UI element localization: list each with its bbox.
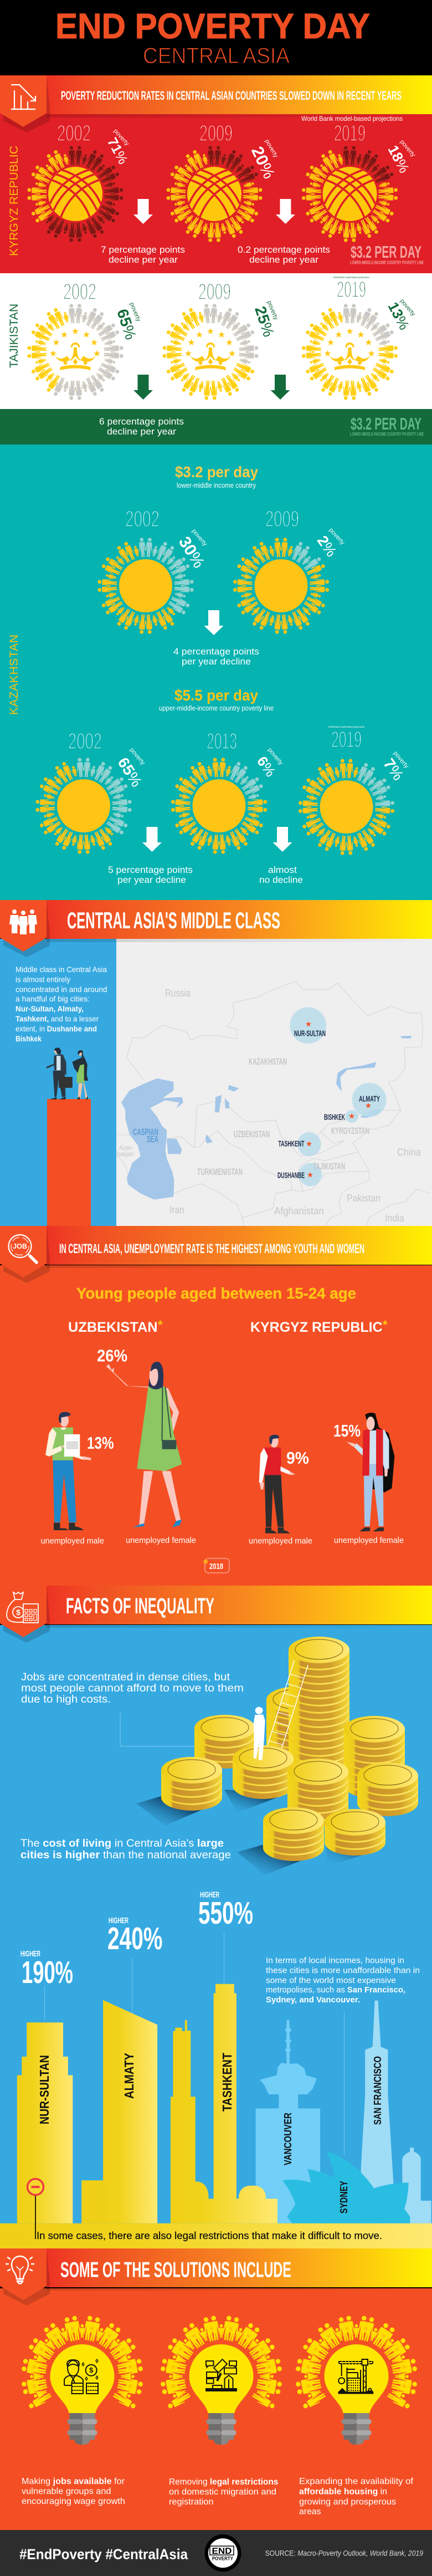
building labels: TASHKENT	[220, 2053, 234, 2112]
dotted leader	[120, 1713, 204, 1746]
icon: no entry sign	[28, 2179, 43, 2239]
panel: unemployment	[0, 1226, 432, 1586]
icon: light bulb	[6, 2256, 34, 2283]
paragraph: housing: these cities is more unaffordable than in	[266, 1966, 420, 1975]
map: DUSHANBE	[277, 1171, 305, 1180]
band: middle class header	[0, 900, 432, 957]
decline text: 5 percentage points	[108, 865, 193, 875]
illustration: business people	[47, 1047, 88, 1099]
building labels: NUR-SULTAN	[37, 2055, 52, 2124]
panel: Tajikistan	[0, 273, 432, 444]
people ring 2019	[301, 304, 398, 400]
dotted leaders	[44, 1933, 344, 2155]
subheading: Young people aged between 15-24 age	[76, 1285, 356, 1302]
map: Iran	[169, 1204, 184, 1215]
paragraph: housing: In terms of local incomes, housing in	[266, 1956, 404, 1965]
label 65%: 65%	[115, 754, 146, 790]
people ring 2019	[298, 759, 395, 855]
figure captions: unemployed male	[249, 1536, 312, 1546]
paragraph: cost of living	[20, 1838, 231, 1861]
pedestal	[47, 1099, 91, 1226]
decline text: decline per year	[109, 254, 178, 265]
label Almaty: HIGHER	[109, 1916, 128, 1925]
solution text 3: Expanding the availability of	[299, 2477, 414, 2486]
solution text 2	[169, 2477, 278, 2507]
people ring 2002	[35, 758, 132, 854]
paragraph: jobs	[21, 1672, 244, 1705]
map: ALMATY	[359, 1094, 380, 1104]
map: CASPIAN	[133, 1127, 158, 1137]
year 2009: 2009	[265, 506, 299, 531]
building labels: SYDNEY	[338, 2181, 349, 2214]
decline text: 4 percentage points	[173, 646, 259, 657]
label Nur-Sultan: 190%	[22, 1955, 73, 1990]
icon: job magnifier	[9, 1235, 37, 1263]
solution text 2: Removing legal restrictions	[169, 2477, 278, 2487]
panel: Kyrgyz Republic	[0, 75, 432, 273]
figure captions: unemployed female	[334, 1536, 404, 1545]
panel: middle class	[0, 900, 432, 1226]
paragraph: housing	[266, 1956, 420, 2005]
subheading: lower-middle income country	[177, 481, 256, 489]
people ring 2009	[162, 304, 259, 400]
year 2019: 2019	[334, 120, 366, 146]
logo: POVERTY	[212, 2556, 233, 2562]
arrow	[142, 827, 162, 852]
value 15%: 15%	[333, 1421, 361, 1440]
year 2002: 2002	[125, 506, 160, 531]
projection note: World Bank model-based projections	[301, 115, 403, 122]
label Almaty	[107, 1916, 163, 1956]
poverty caption: poverty	[191, 528, 209, 548]
people ring 2002	[27, 304, 124, 400]
map: NUR-SULTAN	[294, 1029, 326, 1039]
icon: declining chart	[11, 85, 35, 109]
country heading: UZBEKISTAN	[68, 1320, 158, 1335]
footer	[0, 2530, 432, 2576]
map: BISHKEK	[324, 1113, 345, 1122]
band: inequality header	[0, 1586, 432, 1643]
label 6%: 6%	[254, 753, 279, 780]
label 30%: 30%	[175, 534, 208, 571]
country label: KYRGYZ REPUBLIC	[8, 146, 20, 256]
bulb 2	[160, 2316, 282, 2445]
bulb 1	[21, 2316, 143, 2445]
heading: SOME OF THE SOLUTIONS INCLUDE	[60, 2258, 291, 2282]
sidebar text: Nur-Sultan, Almaty,	[16, 1004, 84, 1013]
poverty caption: poverty	[327, 527, 346, 546]
label 20%: 20%	[248, 144, 278, 182]
poverty caption: poverty	[128, 747, 147, 766]
year note	[203, 1557, 229, 1573]
sidebar text: Middle class in Central Asia	[16, 965, 107, 974]
solution text 2: registration	[169, 2497, 214, 2507]
figure captions	[41, 1536, 404, 1546]
label 25%: 25%	[251, 304, 277, 339]
sidebar text: Bishkek	[16, 1034, 42, 1043]
map: TURKMENISTAN	[197, 1167, 243, 1177]
heading: FACTS OF INEQUALITY	[66, 1594, 214, 1618]
label 2%: 2%	[314, 533, 340, 560]
sidebar text: Tashkent, and to a lesser	[16, 1014, 99, 1023]
panel: solutions	[0, 2248, 432, 2530]
people ring 2009	[166, 146, 263, 242]
icon: worker and money	[64, 2359, 98, 2394]
country label: KAZAKHSTAN	[8, 635, 20, 715]
solution text 1: encouraging wage growth	[22, 2497, 125, 2506]
map: Azer-	[119, 1144, 133, 1152]
year 2009: 2009	[199, 120, 233, 146]
value 26%: 26%	[97, 1346, 127, 1366]
heading: Central Asia: CENTRAL ASIA	[143, 44, 290, 68]
year 2019: 2019	[337, 277, 366, 302]
decline text: 6 percentage points	[99, 416, 184, 427]
people ring 2009	[233, 538, 330, 634]
year 2002: 2002	[68, 728, 102, 754]
solution text 3: affordable housing in	[299, 2487, 387, 2496]
label 7%: 7%	[380, 755, 407, 784]
value 13%: 13%	[87, 1433, 114, 1453]
people ring 2013	[171, 758, 268, 854]
icon: money bag and calculator: $	[16, 1608, 20, 1617]
label Nur-Sultan	[20, 1949, 73, 1990]
year note: 2018	[209, 1562, 223, 1571]
$5.5 heading: $5.5 per day	[174, 687, 258, 704]
label 65%: 65%	[114, 307, 140, 342]
country heading: *	[383, 1318, 388, 1332]
panel: Kazakhstan	[0, 444, 432, 900]
map: Russia	[165, 988, 191, 999]
icon: crane and building	[338, 2359, 373, 2393]
decline text	[101, 244, 185, 265]
sidebar text: is almost entirely	[16, 975, 70, 984]
decline text	[238, 244, 330, 265]
people ring 2019	[301, 146, 398, 242]
skyline: comparison cities	[0, 1984, 432, 2248]
label Almaty: 240%	[107, 1921, 163, 1956]
map: TASHKENT	[278, 1139, 305, 1148]
arrow	[133, 199, 153, 224]
projection note: World Bank model-based projections	[333, 276, 370, 279]
decline text	[99, 416, 184, 437]
subheading: upper-middle-income country poverty line	[159, 704, 274, 712]
label 71%: 71%	[104, 135, 131, 167]
solution text 2: on domestic migration and	[169, 2487, 276, 2497]
map	[116, 938, 432, 1226]
logo	[205, 2534, 241, 2572]
building labels: SAN FRANCISCO	[372, 2056, 383, 2125]
icon: three people	[9, 909, 37, 934]
solution text 1: vulnerable groups and	[22, 2487, 111, 2496]
sidebar text: concentrated in and around	[16, 985, 107, 994]
heading: CENTRAL ASIA'S MIDDLE CLASS	[67, 907, 280, 933]
arrow	[133, 375, 153, 400]
paragraph: housing: some of the world most expensive	[266, 1976, 396, 1985]
arrow	[204, 610, 224, 635]
band: solutions header	[0, 2248, 432, 2306]
decline text: no decline	[259, 875, 303, 885]
paragraph: jobs: most people cannot afford to move to them	[21, 1683, 244, 1694]
figure captions: unemployed female	[126, 1536, 196, 1545]
poverty caption: poverty	[112, 128, 131, 147]
decline text: 7 percentage points	[101, 244, 185, 255]
people ring 2002	[27, 146, 124, 242]
value 9%: 9%	[286, 1448, 309, 1468]
sidebar text	[16, 965, 107, 1043]
icon: gavel and restrictions	[206, 2359, 236, 2391]
band: unemployment header	[0, 1226, 432, 1283]
figure: female Uzbekistan	[106, 1362, 182, 1527]
paragraph: jobs: due to high costs.	[21, 1694, 111, 1705]
icon: job magnifier: JOB	[13, 1243, 27, 1250]
label 13%: 13%	[385, 299, 413, 333]
arrow	[272, 827, 292, 852]
icon: money bag and calculator	[7, 1592, 38, 1623]
country heading: *	[158, 1318, 163, 1332]
solution text 3: areas	[299, 2507, 321, 2516]
label Nur-Sultan: HIGHER	[20, 1949, 40, 1959]
legal restrictions text: In some cases, there are also legal restrictions that make it difficult to move.	[37, 2230, 382, 2241]
year 2002: 2002	[57, 120, 91, 146]
map: Afghanistan	[274, 1205, 324, 1217]
decline text: almost	[268, 865, 297, 875]
label Tashkent: 550%	[198, 1895, 253, 1931]
year 2002: 2002	[63, 279, 96, 304]
building labels: ALMATY	[122, 2053, 136, 2099]
map: UZBEKISTAN	[234, 1129, 270, 1139]
label 18%: 18%	[385, 142, 413, 176]
$3.2 heading: $3.2 per day	[175, 463, 258, 481]
decline text: per year decline	[117, 875, 186, 885]
arrow	[270, 375, 290, 400]
poverty caption: poverty	[399, 298, 417, 318]
decline text: decline per year	[249, 254, 318, 265]
figure: male Kyrgyz	[259, 1435, 295, 1534]
figure: male Uzbekistan	[45, 1412, 91, 1530]
heading: End Poverty Day: END POVERTY DAY	[55, 6, 370, 46]
illustration: coin stacks	[136, 1637, 418, 1875]
map: baijan	[117, 1150, 134, 1158]
country heading: KYRGYZ REPUBLIC	[250, 1320, 383, 1335]
figure captions: unemployed male	[41, 1536, 104, 1546]
paragraph: housing: metropolises, such as San Francisco,	[266, 1985, 405, 1995]
map: KYRGYZSTAN	[331, 1126, 369, 1136]
bulb 3	[295, 2316, 418, 2445]
figure: female Kyrgyz	[347, 1413, 394, 1531]
paragraph: cost of living: cities is higher than the national average	[20, 1849, 231, 1861]
paragraph: cost of living: The cost of living in Central Asia's large	[20, 1838, 224, 1849]
year 2009: 2009	[198, 279, 231, 304]
hashtags: #EndPoverty #CentralAsia	[19, 2546, 188, 2563]
poverty caption: poverty	[128, 301, 142, 323]
decline text	[259, 865, 303, 885]
building labels: VANCOUVER	[282, 2113, 294, 2165]
people ring 2002	[97, 538, 194, 634]
figure: person on coins	[254, 1707, 265, 1760]
band: poverty reduction header	[0, 75, 432, 132]
decline text: per year decline	[182, 656, 251, 667]
map: India	[385, 1213, 405, 1224]
year note: *	[203, 1557, 208, 1571]
year 2013: 2013	[207, 728, 237, 754]
decline text: decline per year	[107, 426, 176, 437]
panel: facts of inequality	[0, 1586, 432, 2248]
poverty caption: poverty	[266, 300, 280, 321]
solution text 1	[22, 2477, 125, 2506]
poverty caption: poverty	[399, 139, 417, 159]
label Tashkent: HIGHER	[200, 1890, 219, 1900]
country label: TAJIKISTAN	[8, 304, 20, 368]
arrow	[276, 199, 295, 224]
poverty caption: poverty	[264, 138, 279, 159]
solution text 1: Making jobs available for	[22, 2477, 125, 2486]
paragraph: housing: Sydney, and Vancouver.	[266, 1995, 360, 2005]
map: China	[397, 1147, 421, 1158]
sidebar text: a handful of big cities:	[16, 994, 90, 1003]
sidebar text: extent, in Dushanbe and	[16, 1024, 97, 1033]
map: TAJIKISTAN	[313, 1161, 345, 1172]
logo: END	[212, 2547, 232, 2556]
projection note: World Bank model-based projections	[328, 725, 365, 728]
label Tashkent	[198, 1890, 253, 1931]
paragraph: jobs: Jobs are concentrated in dense cities, but	[21, 1672, 230, 1683]
building labels	[37, 2053, 383, 2214]
poverty caption: poverty	[392, 750, 410, 770]
poverty caption: poverty	[266, 747, 285, 766]
decline text	[108, 865, 193, 885]
icon: worker and money: $	[89, 2366, 94, 2374]
solution text 3: growing and prosperous	[299, 2497, 396, 2507]
map: KAZAKHSTAN	[249, 1056, 287, 1067]
decline text: 0.2 percentage points	[238, 244, 330, 255]
year 2019: 2019	[331, 727, 362, 752]
ladder	[266, 1660, 308, 1755]
solution text 3	[299, 2477, 414, 2516]
map: SEA	[147, 1134, 158, 1144]
map: Pakistan	[347, 1193, 380, 1204]
decline text	[173, 646, 259, 667]
title	[0, 0, 432, 75]
